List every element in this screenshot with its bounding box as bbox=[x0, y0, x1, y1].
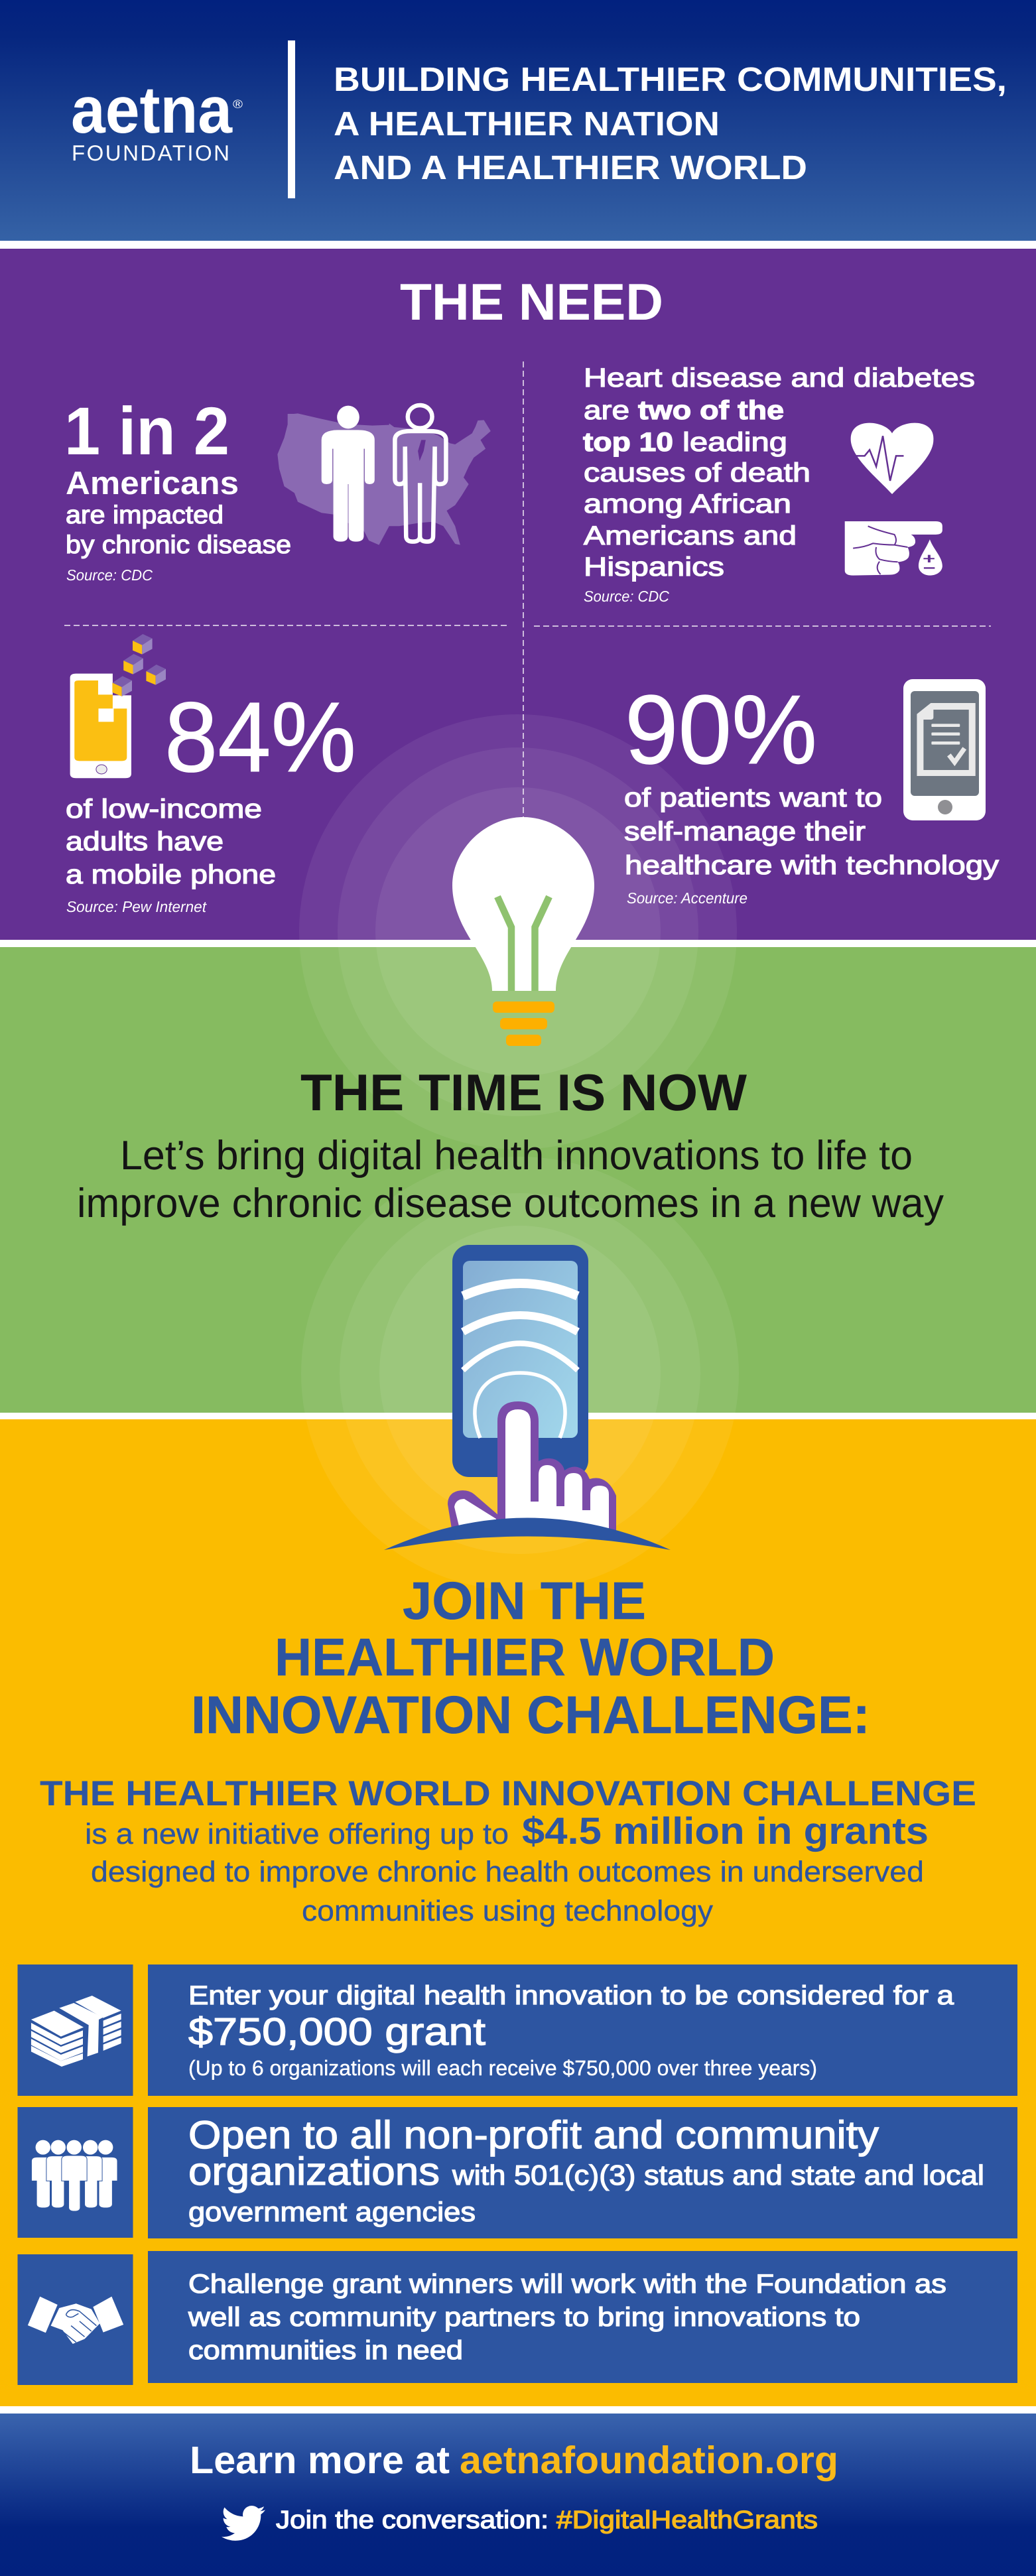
text: challenge description: communities using technology bbox=[302, 1895, 713, 1927]
icon: phone with checklist bbox=[903, 679, 986, 820]
panel: eligibility text: with 501(c)(3) status and state and local bbox=[452, 2159, 984, 2191]
stat: heart disease and diabetes: leading bbox=[682, 428, 787, 457]
stat: 84 percent: Source: Pew Internet bbox=[66, 898, 208, 915]
data cubes bbox=[112, 634, 166, 696]
header banner bbox=[0, 0, 1036, 241]
panel: grant text: $750,000 grant bbox=[188, 2010, 486, 2053]
footer banner bbox=[0, 2414, 1036, 2576]
panel: time is now background bbox=[0, 947, 1036, 1413]
icon: handshake bbox=[17, 2254, 133, 2385]
stat: heart disease and diabetes: Hispanics bbox=[584, 552, 724, 582]
text: bring digital health innovations: improve chronic disease outcomes in a new way bbox=[77, 1181, 944, 1226]
row: grant amount bbox=[17, 1964, 1017, 2096]
icon: us map with people bbox=[277, 405, 491, 545]
dome bbox=[384, 1517, 671, 1550]
person: solid bbox=[322, 406, 375, 542]
text: challenge description: is a new initiative offering up to bbox=[85, 1818, 509, 1850]
phone screen with signal arcs bbox=[463, 1261, 578, 1438]
stat: 90 percent: self-manage their bbox=[624, 817, 866, 846]
icon: stack of money bbox=[17, 1964, 133, 2096]
stat: heart disease and diabetes: Americans and bbox=[584, 521, 797, 550]
icon: finger prick glucose test bbox=[845, 521, 942, 576]
text: bring digital health innovations bbox=[77, 1133, 944, 1226]
stat: heart disease and diabetes: Source: CDC bbox=[584, 588, 669, 605]
header title bbox=[334, 60, 1007, 186]
panel: partners text: communities in need bbox=[188, 2336, 463, 2365]
map of usa bbox=[277, 413, 491, 545]
row: partners bbox=[17, 2251, 1017, 2385]
text: bring digital health innovations: Let’s bring digital health innovations to life to bbox=[120, 1133, 913, 1179]
stat: heart disease and diabetes bbox=[583, 363, 975, 605]
phone body bbox=[452, 1245, 588, 1477]
stat: 84 percent: 84% bbox=[164, 681, 356, 793]
quadrant dividers bbox=[64, 361, 991, 817]
panel: grant text bbox=[148, 1964, 1017, 2096]
stat: 84 percent bbox=[66, 681, 356, 915]
hand bbox=[448, 1401, 616, 1532]
icon: phone with touch gesture bbox=[384, 1245, 671, 1550]
stat: heart disease and diabetes: are bbox=[584, 396, 629, 425]
stat: 90 percent: of patients want to bbox=[624, 783, 882, 812]
stat: 1 in 2 americans: by chronic disease bbox=[66, 531, 291, 559]
panel: grant text: (Up to 6 organizations will each receive $750,000 over three years) bbox=[188, 2056, 817, 2080]
stat: heart disease and diabetes: among African bbox=[584, 489, 791, 519]
stat: 84 percent: of low-income bbox=[66, 795, 262, 824]
header title: A HEALTHIER NATION bbox=[334, 105, 720, 143]
person: outline bbox=[395, 405, 446, 542]
text: challenge description: THE HEALTHIER WORLD INNOVATION CHALLENGE bbox=[40, 1774, 976, 1813]
panel: partners text: Challenge grant winners will work with the Foundation as bbox=[188, 2270, 946, 2299]
footer: learn more: Learn more at bbox=[190, 2439, 450, 2482]
stat: heart disease and diabetes: top 10 bbox=[583, 428, 673, 457]
heading: join the healthier world innovation challenge: JOIN THE bbox=[403, 1571, 646, 1630]
icon: heart with pulse bbox=[851, 423, 933, 494]
footer: join the conversation: Join the conversation: bbox=[276, 2506, 549, 2534]
stat: heart disease and diabetes: two of the bbox=[638, 396, 784, 425]
logo: aetna foundation: FOUNDATION bbox=[72, 141, 229, 165]
bulb glow halo bbox=[299, 714, 737, 1149]
panel: eligibility text bbox=[148, 2107, 1017, 2238]
heading: the need: THE NEED bbox=[400, 273, 663, 331]
stat: 90 percent: healthcare with technology bbox=[625, 851, 999, 880]
heading: join the healthier world innovation challenge: HEALTHIER WORLD bbox=[275, 1628, 775, 1687]
panel: need background bbox=[0, 249, 1036, 940]
text: challenge description bbox=[40, 1774, 976, 1927]
icon: light bulb bbox=[452, 817, 594, 1046]
header title: AND A HEALTHIER WORLD bbox=[334, 149, 807, 186]
text: challenge description: $4.5 million in grants bbox=[522, 1810, 929, 1852]
logo: aetna foundation: aetna bbox=[71, 73, 233, 147]
heading: the time is now: THE TIME IS NOW bbox=[300, 1063, 747, 1122]
stat: 1 in 2 americans: Americans bbox=[66, 466, 239, 501]
header title: BUILDING HEALTHIER COMMUNITIES, bbox=[334, 60, 1007, 98]
stat: heart disease and diabetes: causes of death bbox=[584, 458, 810, 487]
icon: mobile phone with yellow blocks bbox=[70, 634, 166, 778]
panel: eligibility text: government agencies bbox=[188, 2197, 476, 2227]
footer: learn more: aetnafoundation.org bbox=[460, 2439, 838, 2482]
stat: 90 percent: Source: Accenture bbox=[627, 889, 747, 907]
stat: 1 in 2 americans: are impacted bbox=[66, 501, 224, 529]
panel: partners text: well as community partners to bring innovations to bbox=[188, 2303, 860, 2332]
panel: partners text bbox=[148, 2251, 1017, 2383]
panel: eligibility text: Open to all non-profit and community bbox=[188, 2113, 879, 2157]
stat: heart disease and diabetes: Heart disease and diabetes bbox=[584, 363, 975, 393]
text: challenge description: designed to improve chronic health outcomes in underserved bbox=[91, 1856, 924, 1888]
row: eligibility bbox=[17, 2107, 1017, 2238]
footer: join the conversation: #DigitalHealthGrants bbox=[556, 2506, 818, 2534]
stat: 1 in 2 americans bbox=[64, 393, 291, 584]
footer: learn more bbox=[190, 2439, 838, 2482]
stat: 1 in 2 americans: 1 in 2 bbox=[64, 393, 229, 469]
heading: join the healthier world innovation challenge: INNOVATION CHALLENGE: bbox=[191, 1685, 870, 1744]
icon: twitter bird bbox=[222, 2506, 265, 2541]
icon: group of people bbox=[17, 2107, 133, 2238]
panel: eligibility text: organizations bbox=[188, 2150, 440, 2193]
panel: grant text: Enter your digital health innovation to be considered for a bbox=[188, 1981, 954, 2010]
phone glow halo bbox=[301, 1157, 739, 1590]
stat: 1 in 2 americans: Source: CDC bbox=[66, 566, 153, 584]
heading: join the healthier world innovation challenge bbox=[191, 1571, 870, 1744]
stat: 90 percent bbox=[624, 675, 999, 907]
stat: 90 percent: 90% bbox=[625, 675, 817, 785]
stat: 84 percent: a mobile phone bbox=[66, 860, 276, 889]
logo: aetna foundation: ® bbox=[233, 97, 243, 111]
stat: 84 percent: adults have bbox=[66, 827, 224, 856]
header divider bbox=[288, 40, 295, 198]
footer: join the conversation bbox=[276, 2506, 818, 2534]
panel: join background bbox=[0, 1419, 1036, 2406]
